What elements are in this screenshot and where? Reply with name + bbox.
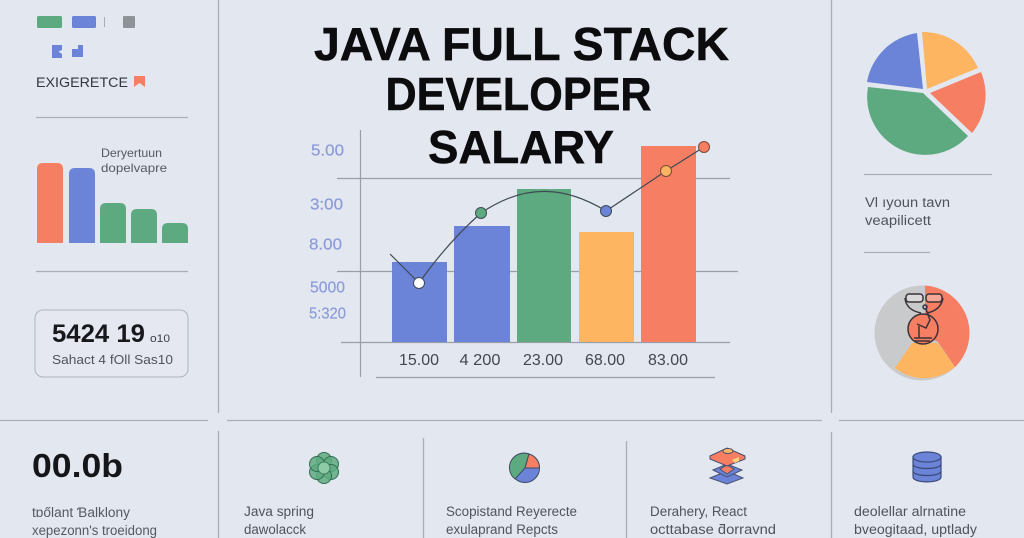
- donut with icon: [874, 286, 970, 380]
- stat caption: Sahact 4 fOll Sas10: [52, 352, 173, 367]
- label: deolellar alrnatine: [854, 504, 966, 519]
- trend line: [390, 142, 710, 288]
- bars: [37, 163, 188, 243]
- stat value: 5424 19: [52, 320, 145, 348]
- experience label: EXIGERETCE: [36, 74, 128, 90]
- chart caption: Deryertuun: [101, 146, 162, 160]
- label: exulaprand Repcts: [446, 522, 558, 537]
- icon: layered stack: [710, 448, 745, 484]
- icon: mini pie: [509, 453, 540, 482]
- stat description: xepezonn's troeidong: [32, 523, 157, 538]
- bottom panel: scope and reports: [446, 453, 577, 537]
- y axis labels: 5.00: [311, 142, 344, 160]
- title: DEVELOPER: [386, 68, 652, 120]
- x axis labels: 83.00: [648, 352, 688, 369]
- label: Scopistand Reyerecte: [446, 504, 577, 519]
- chart caption: dopelvapre: [101, 161, 167, 175]
- x axis labels: 4 200: [460, 352, 501, 369]
- pie caption: Vl ıyoun tavn: [865, 195, 950, 210]
- bottom stat: 00.0b: [32, 447, 157, 538]
- y axis labels: 8.00: [309, 236, 342, 254]
- panel: salary stat card: [35, 310, 188, 377]
- legend chips: [37, 16, 135, 28]
- label: octtabase ƌorravnd: [650, 522, 776, 537]
- y axis labels: [309, 142, 346, 322]
- stat description: tɒőlant Ɓalklony: [32, 505, 130, 520]
- y axis labels: 3:00: [310, 196, 343, 214]
- icon: person with glasses: [905, 294, 943, 344]
- y axis labels: 5:320: [309, 306, 346, 322]
- x axis labels: 23.00: [523, 352, 563, 369]
- label: bveogitaad, uptlady: [854, 522, 977, 537]
- icon: blue glyphs: [52, 45, 83, 58]
- panel: small bar chart: [37, 146, 188, 243]
- pie chart: [867, 32, 986, 155]
- icon: database cylinder: [913, 452, 941, 482]
- title: [314, 18, 729, 173]
- title: SALARY: [428, 121, 614, 173]
- main bar chart: [309, 130, 738, 378]
- stat value: 00.0b: [32, 447, 123, 484]
- x axis labels: 15.00: [399, 352, 439, 369]
- x axis labels: [399, 352, 688, 369]
- stat unit: o10: [150, 333, 170, 345]
- y axis labels: 5000: [310, 280, 345, 296]
- x axis labels: 68.00: [585, 352, 625, 369]
- bottom panel: java spring: [244, 452, 338, 537]
- pie caption: veapilicett: [865, 213, 931, 228]
- label: dawolacck: [244, 522, 306, 537]
- title: JAVA FULL STACK: [314, 18, 729, 70]
- bars: [392, 146, 696, 342]
- label: Derahery, React: [650, 504, 747, 519]
- icon: orange bookmark: [134, 76, 145, 87]
- label: Java spring: [244, 504, 314, 519]
- bottom panel: database: [854, 452, 977, 537]
- bottom panel: react and database: [650, 448, 776, 537]
- icon: green atom: [310, 452, 338, 484]
- panel: experience summary: [36, 16, 145, 90]
